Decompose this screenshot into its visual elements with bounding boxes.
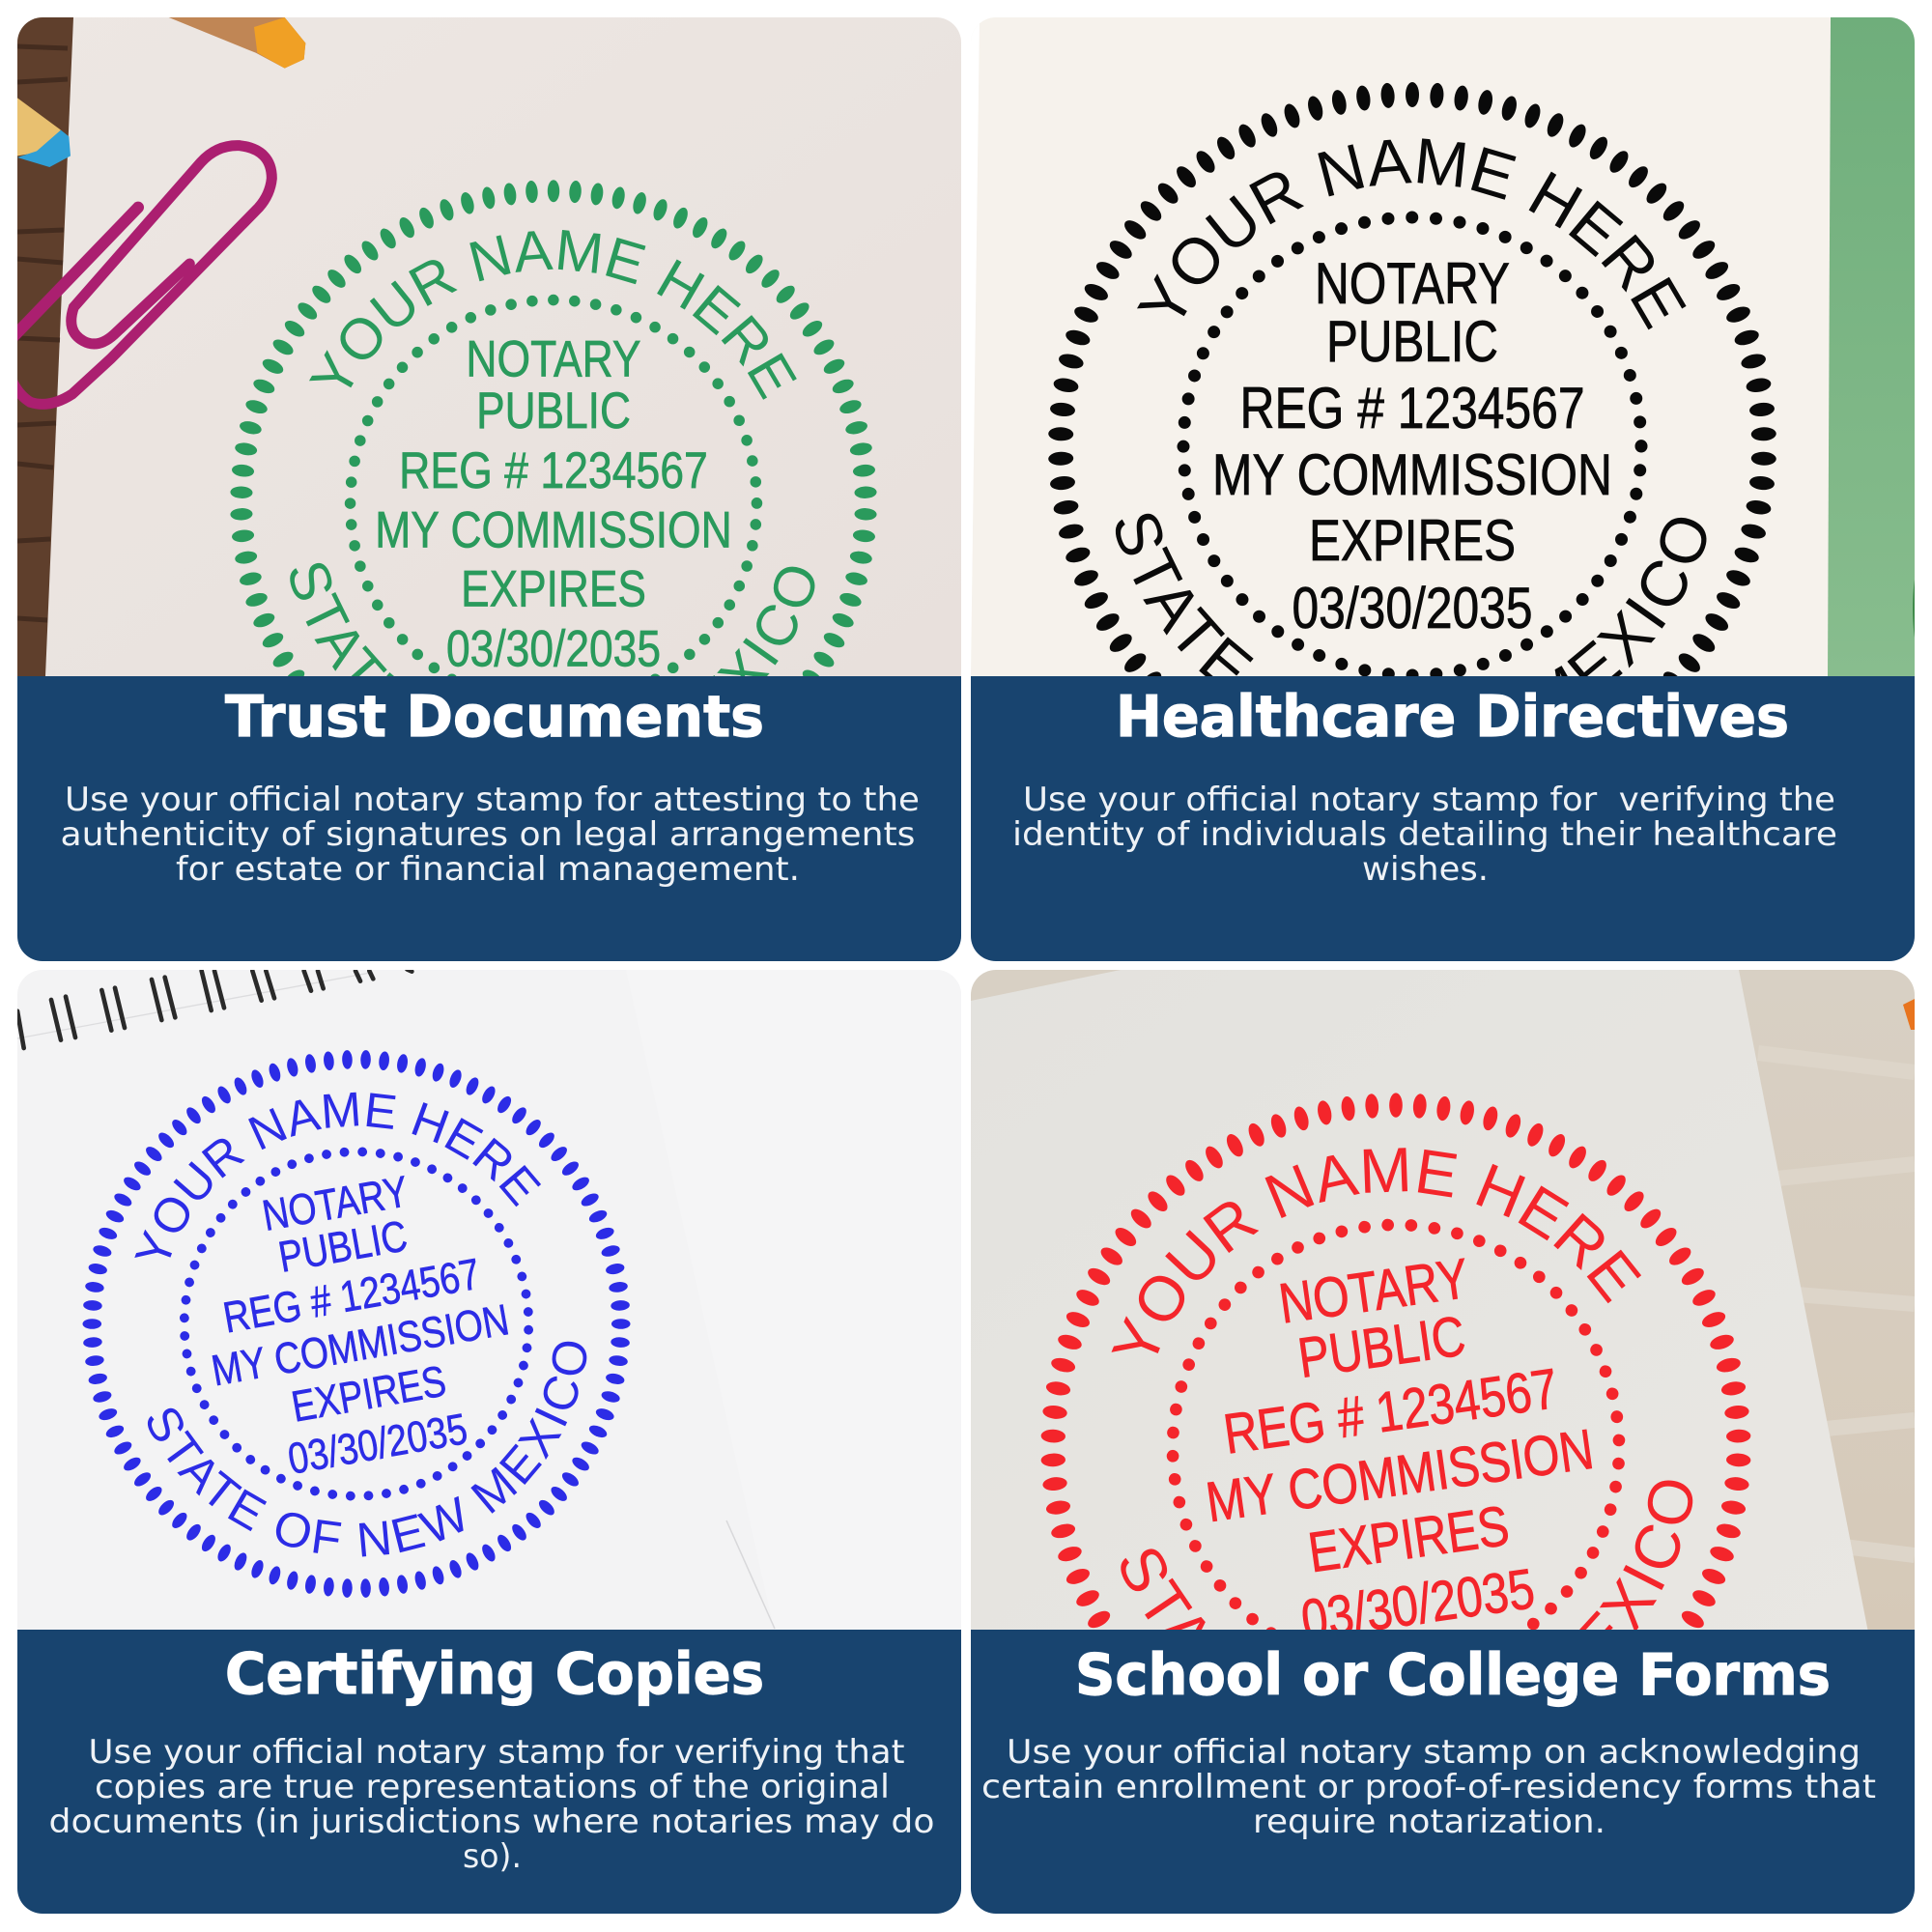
stamp: black notary seal: NOTARY — [1315, 251, 1510, 316]
caption banner — [17, 676, 961, 961]
heading: Trust Documents — [225, 683, 764, 750]
body text: require notarization. — [1253, 1803, 1605, 1841]
body text: so). — [463, 1837, 522, 1876]
panel: Healthcare Directives — [971, 17, 1915, 961]
stamp: green notary seal: PUBLIC — [476, 383, 631, 440]
heading: Healthcare Directives — [1116, 683, 1789, 750]
right notebook page — [626, 970, 961, 1633]
body text: for estate or financial management. — [176, 850, 800, 889]
stamp: blue notary seal: NOTARY — [259, 1166, 412, 1240]
stamp: black notary seal: EXPIRES — [1309, 508, 1516, 573]
body text: documents (in jurisdictions where notaries may do — [48, 1803, 935, 1841]
caption banner — [971, 1630, 1915, 1914]
orange object corner — [1903, 999, 1915, 1030]
wood desk strip — [17, 17, 73, 676]
photo: textured paper on light wood — [971, 970, 1915, 1630]
body text — [60, 781, 920, 889]
body text: authenticity of signatures on legal arrangements — [60, 815, 916, 854]
heading: School or College Forms — [1075, 1641, 1831, 1708]
stamp: black notary seal: MY COMMISSION — [1212, 442, 1612, 507]
body text — [48, 1733, 935, 1876]
stamp: green notary seal: YOUR NAME HERE — [309, 230, 797, 400]
stamp: blue notary seal: PUBLIC — [274, 1210, 411, 1282]
stamp: red notary seal: 03/30/2035 — [1297, 1557, 1539, 1652]
caption banner — [17, 1630, 961, 1914]
stamp: blue notary seal: MY COMMISSION — [208, 1294, 513, 1395]
body text: certain enrollment or proof-of-residency forms that — [981, 1768, 1876, 1806]
body text: Use your official notary stamp for attesting to the — [65, 781, 920, 819]
stamp: green notary seal: MY COMMISSION — [375, 501, 732, 558]
spiral binding — [17, 969, 412, 1048]
stamp: black notary seal: REG # 1234567 — [1240, 376, 1584, 440]
body text: Use your official notary stamp for verifying that — [89, 1733, 904, 1772]
stamp: red notary seal: EXPIRES — [1304, 1494, 1513, 1584]
stamp: blue notary seal: YOUR NAME HERE — [134, 1092, 541, 1258]
stamp: green notary seal: 03/30/2035 — [446, 621, 661, 678]
stamp: green notary seal: STATE OF NEW MEXICO — [290, 562, 815, 676]
panel: Certifying Copies — [17, 970, 961, 1914]
stamp: blue notary seal: STATE OF NEW MEXICO — [147, 1341, 587, 1557]
stamp: green notary seal: EXPIRES — [461, 561, 646, 618]
stamp: blue notary seal — [83, 1050, 630, 1598]
photo: paper on wood with paper clip — [17, 17, 961, 676]
stamp: green notary seal: REG # 1234567 — [399, 442, 708, 499]
stamp: red notary seal: PUBLIC — [1294, 1304, 1469, 1390]
stamp: green notary seal — [230, 180, 877, 676]
body text: identity of individuals detailing their healthcare — [1012, 815, 1837, 854]
stamp: black notary seal — [1048, 82, 1776, 676]
stamp: green notary seal: NOTARY — [466, 331, 641, 388]
stamp: black notary seal: PUBLIC — [1326, 309, 1498, 374]
body text — [981, 1733, 1876, 1841]
photo: paper on green background — [971, 17, 1915, 676]
panel: School or College Forms — [971, 970, 1915, 1914]
stamp: black notary seal: 03/30/2035 — [1293, 576, 1532, 640]
stamp: black notary seal: YOUR NAME HERE — [1137, 138, 1687, 330]
stamp: red notary seal: MY COMMISSION — [1203, 1418, 1597, 1534]
stamp: black notary seal: STATE OF NEW MEXICO — [1115, 514, 1706, 676]
stamp: blue notary seal: 03/30/2035 — [284, 1404, 470, 1484]
stamp: red notary seal: STATE OF NEW MEXICO — [1121, 1480, 1692, 1630]
stamp: blue notary seal: EXPIRES — [288, 1356, 449, 1432]
body text: wishes. — [1362, 850, 1489, 889]
green background — [1828, 17, 1915, 676]
stamp: red notary seal: YOUR NAME HERE — [1111, 1148, 1641, 1353]
paper sheet — [971, 970, 1868, 1633]
stamp: red notary seal: NOTARY — [1275, 1247, 1472, 1336]
pencils and paper clip — [11, 17, 305, 404]
caption banner — [971, 676, 1915, 961]
stamp: blue notary seal: REG # 1234567 — [219, 1249, 483, 1343]
heading: Certifying Copies — [225, 1640, 764, 1707]
body text — [1015, 785, 1835, 881]
body text: Use your official notary stamp on acknowledging — [1007, 1733, 1861, 1772]
body text: Use your official notary stamp for verifying the — [1023, 781, 1835, 819]
panel: Trust Documents — [17, 17, 961, 961]
stamp: red notary seal: REG # 1234567 — [1220, 1357, 1562, 1466]
body text: copies are true representations of the original — [95, 1768, 890, 1806]
stamp: red notary seal — [1041, 1093, 1750, 1630]
photo: open spiral notebook — [17, 970, 961, 1630]
